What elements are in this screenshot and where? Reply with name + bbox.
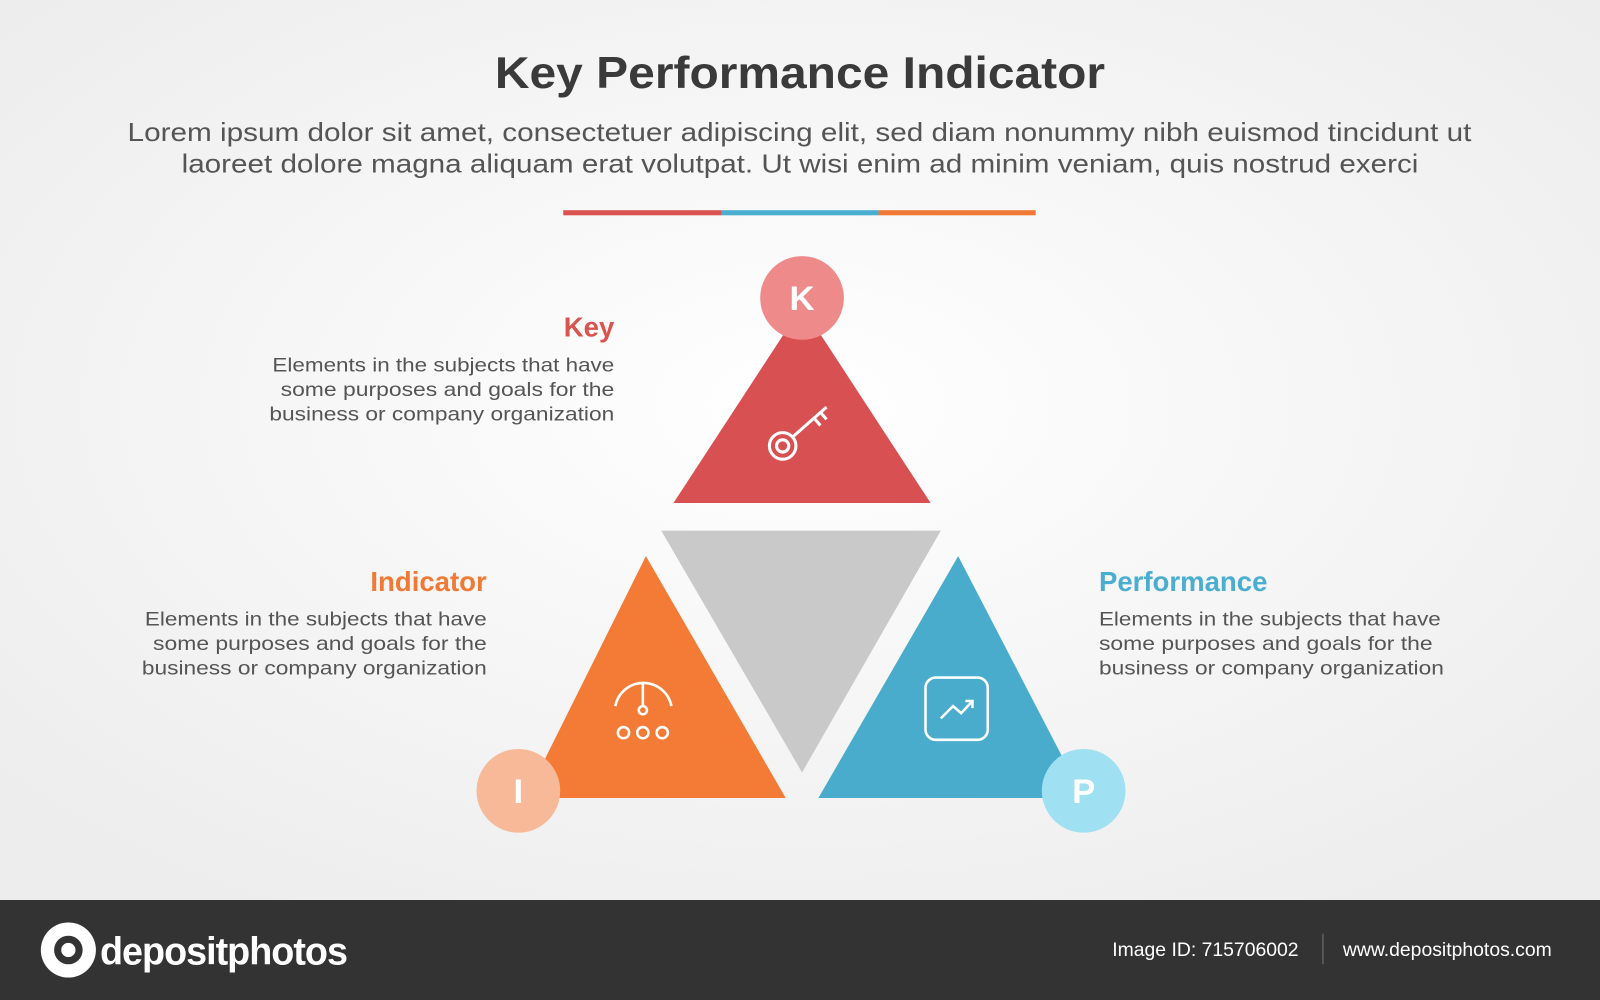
text block: performance: some purposes and goals for the	[1099, 633, 1433, 655]
text block: key: business or company organization	[269, 403, 614, 425]
text block: key: Key	[564, 312, 615, 343]
triangle: performance	[818, 556, 1126, 833]
text block: key: some purposes and goals for the	[281, 379, 614, 401]
text block: performance: Performance	[1099, 566, 1267, 597]
badge I	[477, 749, 560, 833]
title: Key Performance Indicator	[495, 47, 1105, 98]
text block: performance: business or company organization	[1099, 657, 1444, 679]
text block: indicator: business or company organization	[142, 657, 487, 679]
text block: indicator: Indicator	[370, 566, 487, 597]
text block: indicator: Elements in the subjects that have	[145, 609, 487, 631]
logo	[41, 922, 347, 978]
logo: depositphotos	[100, 930, 347, 973]
triangle: center gray	[661, 531, 941, 772]
subtitle: Lorem ipsum dolor sit amet, consectetuer adipiscing elit, sed diam nonummy nibh euismod tincidunt ut	[128, 119, 1471, 147]
footer bar	[0, 900, 1600, 1000]
text block: indicator	[142, 566, 487, 679]
text block: performance	[1099, 566, 1444, 679]
badge K	[760, 256, 844, 340]
subtitle	[128, 119, 1471, 178]
triangle: key	[673, 256, 931, 503]
footer bar: www.depositphotos.com	[1342, 939, 1552, 961]
divider tricolor	[563, 210, 1036, 215]
image id: Image ID: 715706002	[1112, 939, 1299, 961]
icon: gauge	[615, 683, 671, 738]
subtitle: laoreet dolore magna aliquam erat volutpat. Ut wisi enim ad minim veniam, quis nostrud exerci	[182, 150, 1418, 178]
text block: indicator: some purposes and goals for the	[153, 633, 487, 655]
text block: performance: Elements in the subjects that have	[1099, 609, 1441, 631]
text block: key	[269, 312, 615, 425]
icon: chart	[926, 678, 988, 740]
badge I: I	[514, 773, 523, 811]
badge P: P	[1072, 773, 1095, 811]
icon: key	[769, 407, 827, 459]
triangle: indicator	[477, 556, 786, 833]
badge P	[1042, 749, 1126, 833]
text block: key: Elements in the subjects that have	[272, 354, 614, 376]
badge K: K	[790, 280, 815, 318]
